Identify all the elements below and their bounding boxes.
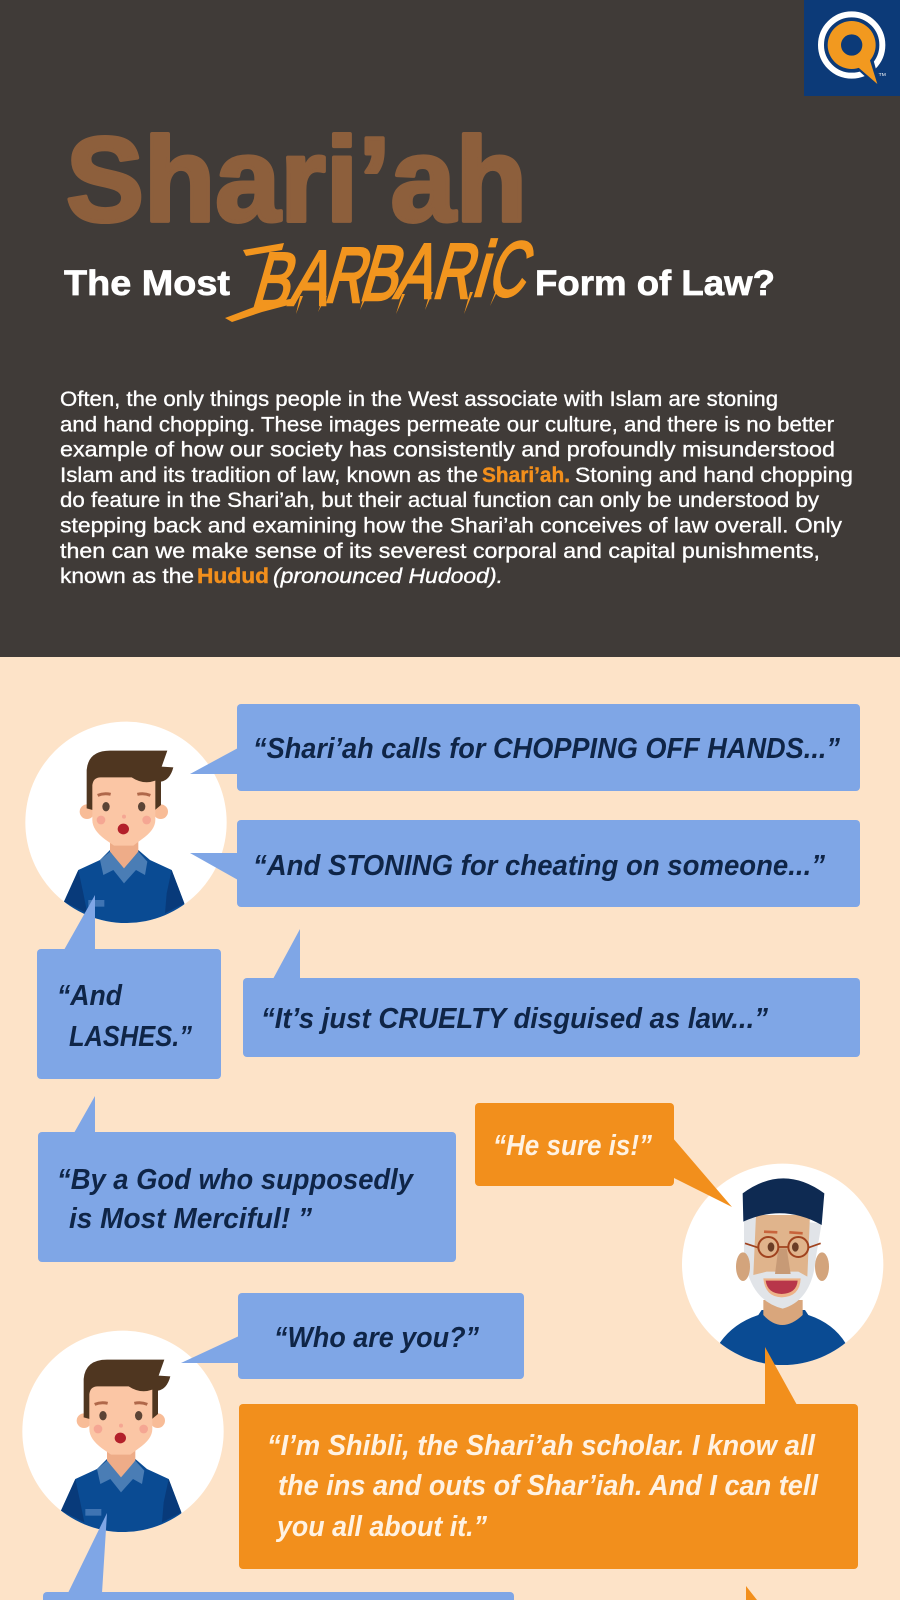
avatar: young man bottom (22, 1331, 224, 1542)
text block: introduction: then can we make sense of its severest corporal and capital punishments, (60, 539, 820, 563)
brush strokes on BARBARIC (225, 243, 498, 322)
speech bubble: most merciful: is Most Merciful! ” (69, 1203, 313, 1235)
brush word: BARBARIC: A (283, 235, 346, 322)
subtitle: Form of Law? (535, 263, 775, 303)
speech bubble: Shibli introduction: you all about it.” (275, 1511, 488, 1543)
speech bubble: cruelty: “It’s just CRUELTY disguised as law...” (261, 1003, 769, 1035)
speech bubble: cut-off bottom blue (43, 1513, 514, 1600)
speech bubble: stoning: “And STONING for cheating on someone...” (253, 850, 826, 882)
speech bubble: chopping off hands (190, 704, 860, 791)
text block: introduction: Islam and its tradition of law, known as the (60, 463, 478, 487)
text block: introduction: and hand chopping. These images permeate our culture, and there is no better (60, 412, 834, 436)
speech bubble: he sure is (475, 1103, 732, 1207)
brush word: BARBARIC (225, 226, 543, 324)
text block: introduction: Hudud (197, 564, 269, 588)
subtitle: The Most (64, 263, 230, 303)
brush word: BARBARIC: R (426, 227, 490, 315)
speech bubble: Shibli introduction (239, 1347, 858, 1569)
speech bubble: who are you (181, 1293, 524, 1379)
text block: introduction: known as the (60, 564, 194, 588)
icon: Q logo (804, 0, 900, 96)
speech bubble: Shibli introduction: the ins and outs of Shar’iah. And I can tell (278, 1470, 819, 1502)
text block: introduction: example of how our society has consistently and profoundly misunderstood (60, 438, 835, 462)
speech bubble: lashes: LASHES.” (69, 1021, 193, 1053)
speech bubble: most merciful: “By a God who supposedly (57, 1164, 415, 1196)
speech bubble: cruelty (243, 929, 860, 1057)
speech bubble: who are you: “Who are you?” (274, 1322, 480, 1354)
brush word: BARBARIC: A (388, 228, 451, 315)
text block: introduction: do feature in the Shari’ah, but their actual function can only be understood by (60, 488, 819, 512)
brush word: BARBARIC: B (245, 237, 308, 324)
text block: introduction: stepping back and examining how the Shari’ah conceives of law overall. Only (60, 514, 842, 538)
speech bubble: lashes (37, 895, 221, 1079)
panel: peach dialogue background (0, 657, 900, 1600)
speech bubble: most merciful (38, 1096, 456, 1262)
title: Shari’ah (66, 113, 527, 247)
brush word: BARBARIC: i (466, 226, 505, 313)
speech bubble: stoning (190, 820, 860, 907)
text block: introduction: (pronounced Hudood). (273, 564, 503, 588)
speech bubble: he sure is: “He sure is!” (493, 1130, 653, 1162)
speech bubble tail: cut-off bottom orange (746, 1586, 757, 1600)
text block: introduction (60, 387, 853, 588)
text block: introduction: Often, the only things people in the West associate with Islam are stoning (60, 387, 778, 411)
subtitle (64, 226, 775, 324)
speech bubble: Shibli introduction: “I’m Shibli, the Shari’ah scholar. I know all (267, 1430, 816, 1462)
speech bubble: lashes: “And (57, 980, 123, 1012)
brush word: BARBARIC: C (481, 226, 543, 313)
avatar: young man top (25, 722, 227, 933)
text block: introduction: Stoning and hand chopping (575, 463, 853, 487)
avatar: scholar Shibli (682, 1164, 883, 1367)
icon: Q logo: TM (879, 72, 886, 78)
speech bubble: chopping off hands: “Shari’ah calls for CHOPPING OFF HANDS...” (253, 733, 841, 765)
panel: dark header background (0, 0, 900, 657)
brush word: BARBARIC: B (353, 230, 416, 317)
text block: introduction: Shari’ah. (482, 463, 570, 487)
brush word: BARBARIC: R (318, 231, 382, 319)
